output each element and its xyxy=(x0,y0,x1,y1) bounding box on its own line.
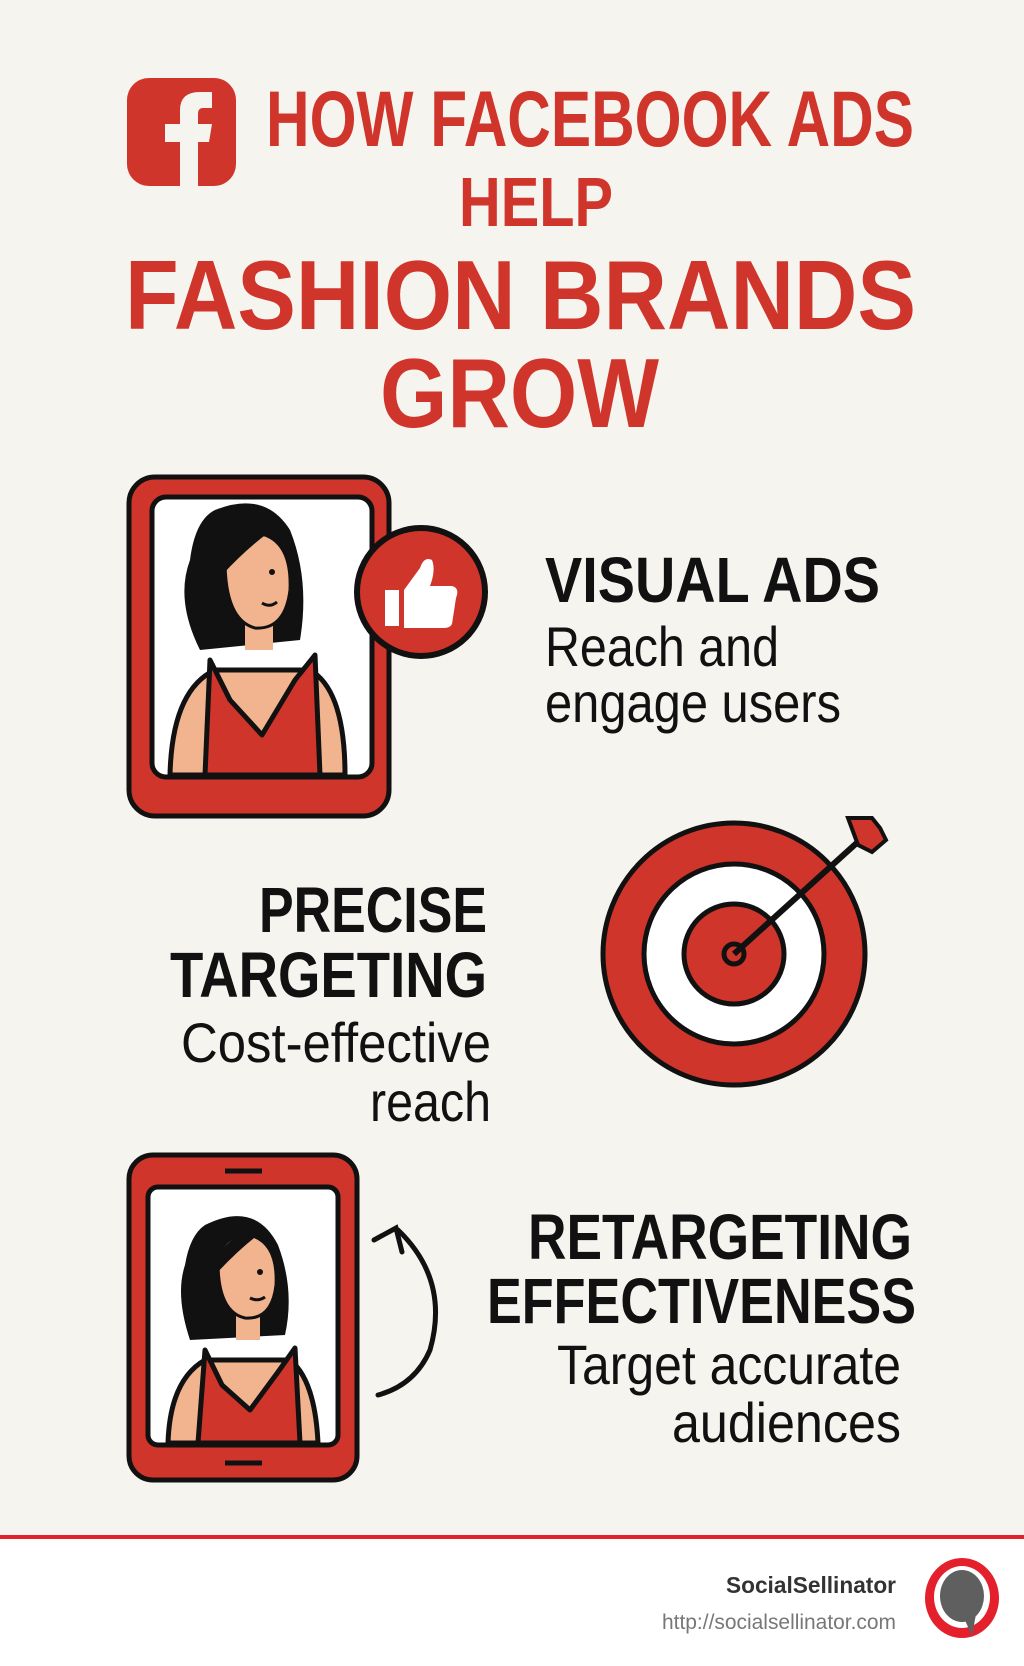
text: visual ads: Reach and xyxy=(545,615,779,678)
arrow xyxy=(734,818,886,954)
text: visual ads: engage users xyxy=(545,671,841,734)
text: retargeting effectiveness: Target accurate xyxy=(557,1333,901,1396)
text: precise targeting: TARGETING xyxy=(170,939,487,1011)
icon: phone with woman and like xyxy=(129,477,485,816)
text: precise targeting: Cost-effective xyxy=(181,1011,491,1074)
text: precise targeting xyxy=(170,874,491,1133)
icon: socialsellinator logo xyxy=(925,1558,999,1638)
text: retargeting effectiveness: RETARGETING xyxy=(528,1201,912,1273)
footer: brand text: http://socialsellinator.com xyxy=(662,1611,896,1634)
title xyxy=(125,74,916,448)
icon: thumbs up badge xyxy=(357,528,485,656)
title: GROW xyxy=(380,338,659,448)
text: precise targeting: PRECISE xyxy=(259,874,487,946)
text: retargeting effectiveness xyxy=(487,1201,916,1454)
title: HELP xyxy=(459,163,613,241)
icon: target with arrow xyxy=(603,818,886,1085)
text: visual ads: VISUAL ADS xyxy=(545,544,880,616)
icon: facebook logo xyxy=(127,78,236,186)
text: visual ads xyxy=(545,544,880,734)
woman 2 xyxy=(168,1216,318,1443)
title: FASHION BRANDS xyxy=(125,240,916,350)
text: retargeting effectiveness: audiences xyxy=(672,1391,901,1454)
arrow: curved retarget arrow xyxy=(374,1228,436,1395)
text: retargeting effectiveness: EFFECTIVENESS xyxy=(487,1265,916,1337)
text: precise targeting: reach xyxy=(370,1070,491,1133)
icon: phone with woman (retargeting) xyxy=(129,1155,357,1480)
woman 1 xyxy=(170,503,345,775)
footer: brand text xyxy=(662,1572,896,1634)
footer: brand text: SocialSellinator xyxy=(726,1572,896,1598)
